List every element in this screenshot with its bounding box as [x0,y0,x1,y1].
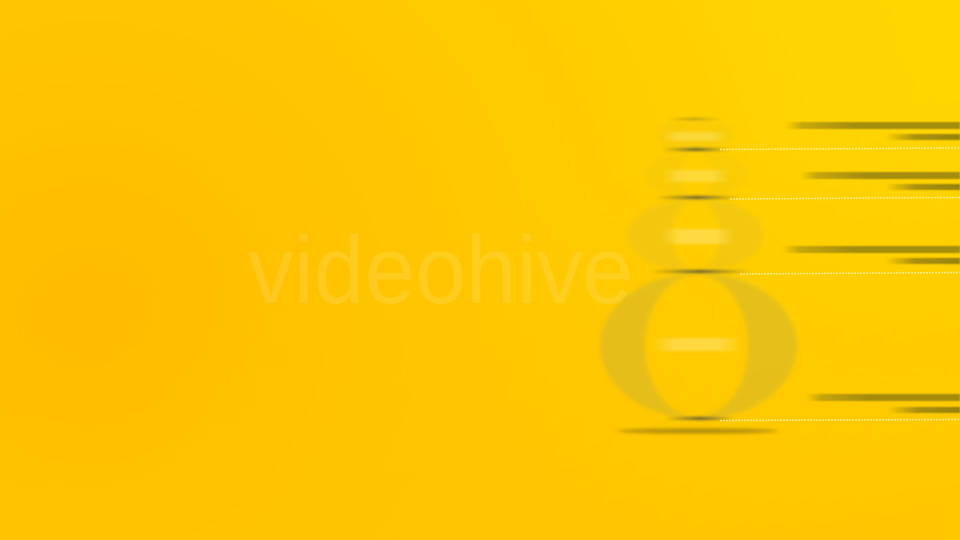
label row 4 [720,394,960,420]
stacked rings diagram [600,118,797,420]
ring 1: top [655,118,735,150]
watermark: videohive: videohive [248,217,633,324]
ring lips [668,118,720,120]
ground shadow [618,428,778,434]
label row 1 [720,122,960,150]
ring 2 [645,150,748,198]
ring 3 [628,198,763,272]
label row 2 [730,172,960,199]
ring 4: bottom [600,273,797,419]
ring highlights [662,132,728,141]
label row 3 [740,246,960,274]
